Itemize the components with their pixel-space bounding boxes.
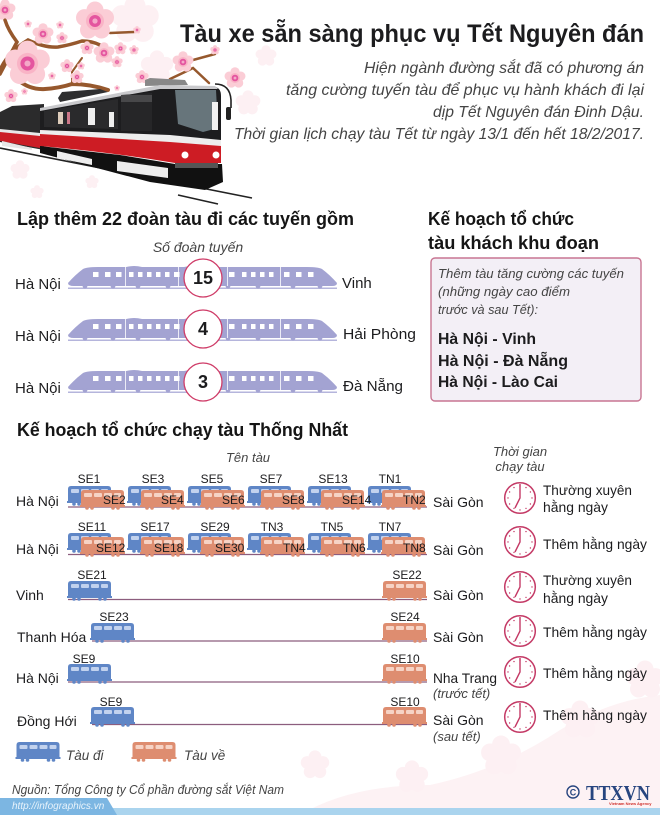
- intro text: tăng cường tuyến tàu để phục vụ hành khách đi lại: [286, 81, 644, 99]
- route: Hà Nội to Đà Nẵng: 3: [198, 372, 208, 392]
- row 6: Đồng Hới to Sài Gòn: (sau tết): [433, 729, 481, 744]
- panel: local train routes: (những ngày cao điểm: [438, 285, 570, 299]
- row 1: Hà Nội to Sài Gòn: SE8: [282, 493, 305, 507]
- running time: row 6: Thêm hằng ngày: [543, 707, 647, 723]
- row 2: Hà Nội to Sài Gòn: SE17: [140, 520, 170, 534]
- intro text: dịp Tết Nguyên đán Đinh Dậu.: [433, 104, 644, 121]
- logo: TTXVN: Vietnam News Agency: [609, 801, 652, 806]
- row 2: Hà Nội to Sài Gòn: TN6: [343, 541, 366, 555]
- row 1: Hà Nội to Sài Gòn: SE2: [103, 493, 126, 507]
- row 4: Thanh Hóa to Sài Gòn: Thanh Hóa: [17, 629, 86, 645]
- row 1: Hà Nội to Sài Gòn: TN1: [379, 472, 402, 486]
- heading: Thống Nhất trains: Kế hoạch tổ chức chạy tàu Thống Nhất: [17, 420, 348, 440]
- label: running time: Thời gian: [493, 444, 547, 459]
- row 4: Thanh Hóa to Sài Gòn: [17, 610, 484, 645]
- row 2: Hà Nội to Sài Gòn: Hà Nội: [16, 541, 59, 557]
- row 4: Thanh Hóa to Sài Gòn: SE24: [390, 610, 420, 624]
- row 6: Đồng Hới to Sài Gòn: [17, 695, 484, 744]
- running time: row 5: [505, 657, 647, 687]
- row 5: Hà Nội to Nha Trang: SE10: [390, 652, 420, 666]
- row 4: Thanh Hóa to Sài Gòn: SE23: [99, 610, 129, 624]
- route: Hà Nội to Đà Nẵng: Đà Nẵng: [343, 378, 403, 395]
- logo: TTXVN: [567, 781, 652, 806]
- row 1: Hà Nội to Sài Gòn: SE14: [342, 493, 372, 507]
- row 5: Hà Nội to Nha Trang: Hà Nội: [16, 670, 59, 686]
- running time: row 2: [505, 527, 647, 557]
- row 2: Hà Nội to Sài Gòn: Sài Gòn: [433, 542, 484, 558]
- row 2: Hà Nội to Sài Gòn: TN5: [321, 520, 344, 534]
- panel: local train routes: Hà Nội - Đà Nẵng: [438, 350, 568, 370]
- running time: row 4: [505, 616, 647, 646]
- route: Hà Nội to Hải Phòng: Hải Phòng: [343, 326, 416, 343]
- title: Tàu xe sẵn sàng phục vụ Tết Nguyên đán: [180, 18, 644, 48]
- footer bar: http://infographics.vn: [12, 801, 105, 812]
- row 5: Hà Nội to Nha Trang: Nha Trang: [433, 670, 497, 686]
- row 4: Thanh Hóa to Sài Gòn: Sài Gòn: [433, 629, 484, 645]
- row 5: Hà Nội to Nha Trang: (trước tết): [433, 686, 490, 701]
- label: number of trains: Số đoàn tuyến: [153, 239, 243, 255]
- row 2: Hà Nội to Sài Gòn: SE29: [200, 520, 230, 534]
- row 2: Hà Nội to Sài Gòn: TN4: [283, 541, 306, 555]
- pale blossom background: top: [10, 0, 276, 198]
- row 1: Hà Nội to Sài Gòn: TN2: [403, 493, 426, 507]
- heading: local trains: tàu khách khu đoạn: [428, 233, 599, 253]
- panel: local train routes: [431, 258, 641, 401]
- label: train names: Tên tàu: [226, 450, 270, 465]
- label: running time: chạy tàu: [495, 459, 545, 474]
- row 1: Hà Nội to Sài Gòn: SE5: [201, 472, 224, 486]
- row 2: Hà Nội to Sài Gòn: SE11: [78, 520, 107, 534]
- row 1: Hà Nội to Sài Gòn: Sài Gòn: [433, 494, 484, 510]
- route: Hà Nội to Hải Phòng: [15, 310, 416, 348]
- route: Hà Nội to Hải Phòng: Hà Nội: [15, 328, 61, 345]
- row 5: Hà Nội to Nha Trang: [16, 652, 497, 701]
- footer bar: [0, 798, 660, 815]
- heading: local trains: Kế hoạch tổ chức: [428, 209, 574, 229]
- row 2: Hà Nội to Sài Gòn: SE30: [215, 541, 245, 555]
- row 1: Hà Nội to Sài Gòn: SE4: [161, 493, 184, 507]
- row 3: Vinh to Sài Gòn: Sài Gòn: [433, 587, 484, 603]
- heading: local trains: [428, 209, 599, 253]
- legend: [16, 742, 225, 763]
- running time: row 1: hằng ngày: [543, 499, 608, 515]
- row 1: Hà Nội to Sài Gòn: SE6: [222, 493, 245, 507]
- logo: TTXVN: TTXVN: [586, 781, 650, 805]
- row 3: Vinh to Sài Gòn: SE21: [77, 568, 107, 582]
- row 6: Đồng Hới to Sài Gòn: Đồng Hới: [17, 713, 77, 729]
- row 6: Đồng Hới to Sài Gòn: SE9: [100, 695, 123, 709]
- heading: extra routes: Lập thêm 22 đoàn tàu đi các tuyến gồm: [17, 209, 354, 229]
- row 2: Hà Nội to Sài Gòn: TN3: [261, 520, 284, 534]
- route: Hà Nội to Vinh: Vinh: [342, 275, 372, 292]
- running time: row 2: Thêm hằng ngày: [543, 536, 647, 552]
- running time: row 3: [505, 572, 632, 606]
- row 5: Hà Nội to Nha Trang: SE9: [73, 652, 96, 666]
- route: Hà Nội to Đà Nẵng: Hà Nội: [15, 380, 61, 397]
- intro text: [234, 58, 644, 143]
- running time: row 1: [505, 482, 632, 515]
- row 1: Hà Nội to Sài Gòn: SE7: [260, 472, 283, 486]
- row 2: Hà Nội to Sài Gòn: SE12: [96, 541, 126, 555]
- row 6: Đồng Hới to Sài Gòn: Sài Gòn: [433, 712, 484, 728]
- row 3: Vinh to Sài Gòn: Vinh: [16, 587, 44, 603]
- panel: local train routes: trước và sau Tết):: [438, 303, 538, 317]
- intro text: Hiện ngành đường sắt đã có phương án: [364, 58, 644, 77]
- route: Hà Nội to Vinh: 15: [193, 268, 213, 288]
- panel: local train routes: Hà Nội - Vinh: [438, 331, 536, 348]
- illustration: red and black train: [0, 78, 252, 204]
- row 6: Đồng Hới to Sài Gòn: SE10: [390, 695, 420, 709]
- panel: local train routes: Thêm tàu tăng cường các tuyến: [438, 267, 624, 281]
- legend: Tàu đi: [66, 748, 105, 763]
- panel: local train routes: Hà Nội - Lào Cai: [438, 374, 558, 391]
- label: running time: [493, 444, 547, 474]
- row 2: Hà Nội to Sài Gòn: SE18: [154, 541, 184, 555]
- pale blossom background: bottom right: [300, 660, 660, 815]
- illustration: blossom branch: [0, 0, 245, 102]
- running time: row 6: [505, 702, 647, 732]
- route: Hà Nội to Đà Nẵng: [15, 363, 403, 401]
- source: Nguồn: Tổng Công ty Cổ phần đường sắt Việt Nam: [12, 782, 284, 797]
- row 2: Hà Nội to Sài Gòn: [16, 520, 484, 558]
- route: Hà Nội to Hải Phòng: 4: [198, 319, 208, 339]
- row 2: Hà Nội to Sài Gòn: TN8: [403, 541, 426, 555]
- row 3: Vinh to Sài Gòn: SE22: [392, 568, 422, 582]
- legend: Tàu về: [184, 748, 225, 763]
- row 1: Hà Nội to Sài Gòn: Hà Nội: [16, 493, 59, 509]
- running time: row 1: Thường xuyên: [543, 482, 632, 498]
- row 1: Hà Nội to Sài Gòn: SE3: [142, 472, 165, 486]
- running time: row 3: hằng ngày: [543, 590, 608, 606]
- row 1: Hà Nội to Sài Gòn: [16, 472, 484, 510]
- running time: row 5: Thêm hằng ngày: [543, 665, 647, 681]
- row 2: Hà Nội to Sài Gòn: TN7: [379, 520, 402, 534]
- route: Hà Nội to Vinh: Hà Nội: [15, 276, 61, 293]
- intro text: Thời gian lịch chạy tàu Tết từ ngày 13/1 đến hết 18/2/2017.: [234, 126, 644, 143]
- row 1: Hà Nội to Sài Gòn: SE13: [318, 472, 348, 486]
- row 1: Hà Nội to Sài Gòn: SE1: [78, 472, 101, 486]
- row 3: Vinh to Sài Gòn: [16, 568, 484, 603]
- logo: TTXVN: C: [570, 788, 577, 798]
- running time: row 4: Thêm hằng ngày: [543, 624, 647, 640]
- running time: row 3: Thường xuyên: [543, 572, 632, 588]
- route: Hà Nội to Vinh: [15, 259, 372, 297]
